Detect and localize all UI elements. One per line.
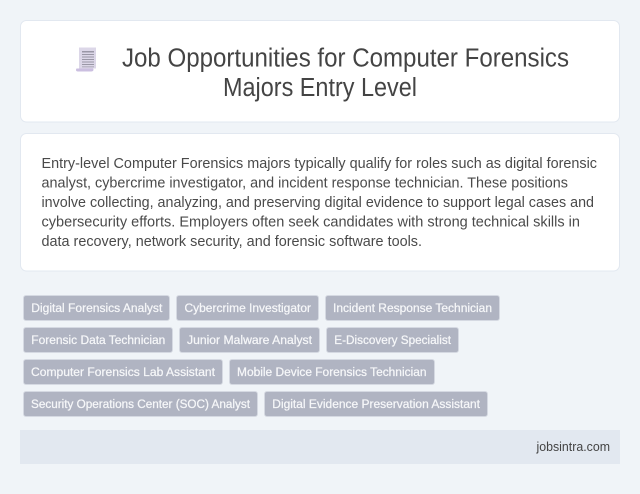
- panel: header: [20, 20, 620, 122]
- panel: description: [20, 134, 620, 271]
- title: [122, 44, 569, 102]
- tag: Incident Response Technician: [326, 296, 500, 320]
- footer credit: jobsintra.com: [536, 440, 610, 454]
- text block: description: Entry-level Computer Forensics majors typically qualify for roles such as digital forensic: [42, 156, 598, 172]
- tag: Junior Malware Analyst: Junior Malware Analyst: [187, 333, 313, 347]
- tag: Digital Evidence Preservation Assistant: [264, 392, 488, 416]
- text block: description: cybersecurity efforts. Employers often seek candidates with strong technical skills in: [42, 214, 580, 230]
- footer: [20, 430, 620, 464]
- tag: E-Discovery Specialist: E-Discovery Specialist: [334, 333, 452, 347]
- tag: Computer Forensics Lab Assistant: [24, 360, 222, 384]
- tag: Forensic Data Technician: Forensic Data Technician: [31, 333, 165, 347]
- tag: Mobile Device Forensics Technician: [230, 360, 434, 384]
- tag: Computer Forensics Lab Assistant: Computer Forensics Lab Assistant: [31, 365, 216, 379]
- tag: E-Discovery Specialist: [326, 328, 458, 352]
- tag: Incident Response Technician: Incident Response Technician: [333, 301, 492, 315]
- tag: Security Operations Center (SOC) Analyst: [24, 392, 258, 416]
- tag list: [24, 296, 500, 416]
- tag: Digital Forensics Analyst: Digital Forensics Analyst: [31, 301, 163, 315]
- icon: document scroll: [76, 48, 96, 72]
- title: Job Opportunities for Computer Forensics: [122, 44, 569, 72]
- tag: Cybercrime Investigator: Cybercrime Investigator: [184, 301, 311, 315]
- tag: Junior Malware Analyst: [180, 328, 320, 352]
- text block: description: analyst, cybercrime investigator, and incident response technician. These positions: [42, 176, 568, 192]
- tag: Cybercrime Investigator: [176, 296, 318, 320]
- tag: Digital Evidence Preservation Assistant: Digital Evidence Preservation Assistant: [272, 397, 481, 411]
- tag: Digital Forensics Analyst: [24, 296, 170, 320]
- text block: description: [42, 156, 598, 250]
- text block: description: involve collecting, analyzing, and preserving digital evidence to support legal cases and: [42, 195, 594, 211]
- text block: description: data recovery, network security, and forensic software tools.: [42, 234, 422, 250]
- tag: Security Operations Center (SOC) Analyst: Security Operations Center (SOC) Analyst: [31, 397, 251, 411]
- tag: Mobile Device Forensics Technician: Mobile Device Forensics Technician: [237, 365, 426, 379]
- tag: Forensic Data Technician: [24, 328, 172, 352]
- title: Majors Entry Level: [223, 74, 417, 102]
